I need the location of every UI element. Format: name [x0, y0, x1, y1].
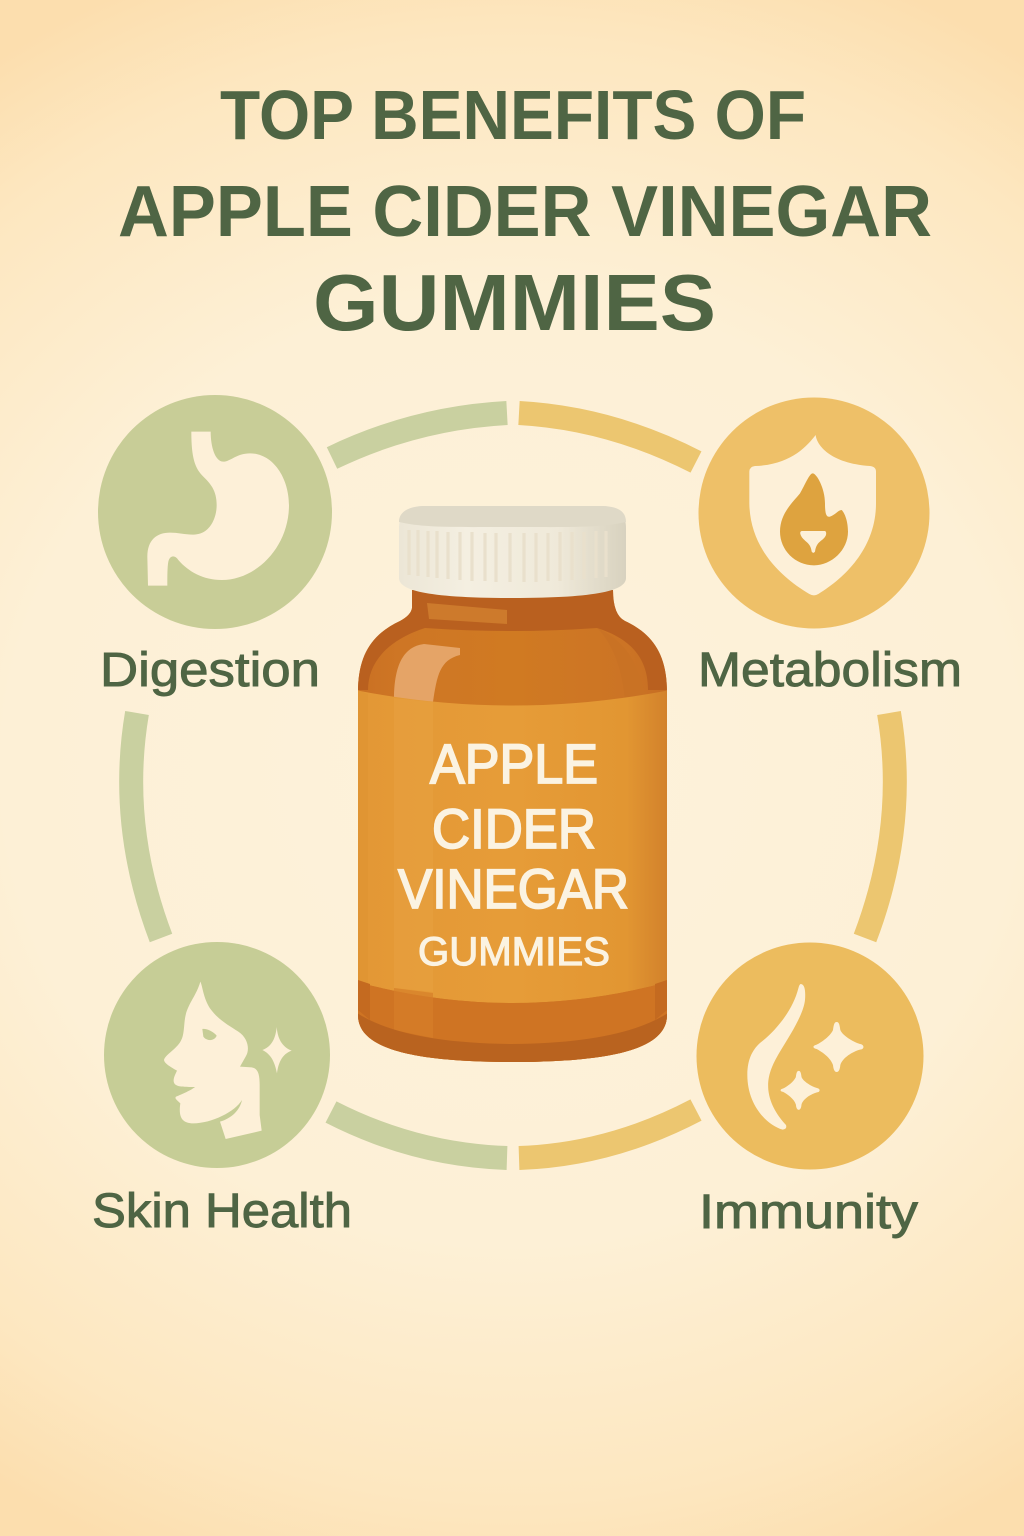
- title: [118, 76, 932, 347]
- label: digestion: Digestion: [100, 644, 320, 697]
- benefit: immunity: [696, 942, 924, 1239]
- bottle body: [350, 585, 675, 1070]
- bottle label text: GUMMIES: [418, 930, 610, 974]
- benefit: skin health: [92, 942, 352, 1238]
- ring arcs: [131, 413, 895, 1158]
- bottle label text: VINEGAR: [398, 857, 629, 920]
- bottle label text: CIDER: [432, 797, 596, 860]
- benefit: metabolism: [698, 398, 962, 697]
- icon: shield with flame: [698, 398, 930, 628]
- icon: face profile with sparkle: [104, 942, 330, 1168]
- bottle label text: [398, 732, 629, 974]
- label: skin health: Skin Health: [92, 1185, 352, 1238]
- icon: stomach: [98, 395, 332, 629]
- label: immunity: Immunity: [699, 1186, 918, 1239]
- title: GUMMIES: [313, 258, 716, 347]
- bottle label text: APPLE: [430, 732, 598, 795]
- icon: wave with sparkles: [696, 942, 924, 1170]
- title: TOP BENEFITS OF: [220, 76, 806, 154]
- bottle cap: [399, 506, 626, 598]
- label: metabolism: Metabolism: [698, 644, 962, 697]
- supplement bottle: [350, 506, 675, 1070]
- benefit: digestion: [98, 395, 332, 697]
- title: APPLE CIDER VINEGAR: [118, 172, 932, 252]
